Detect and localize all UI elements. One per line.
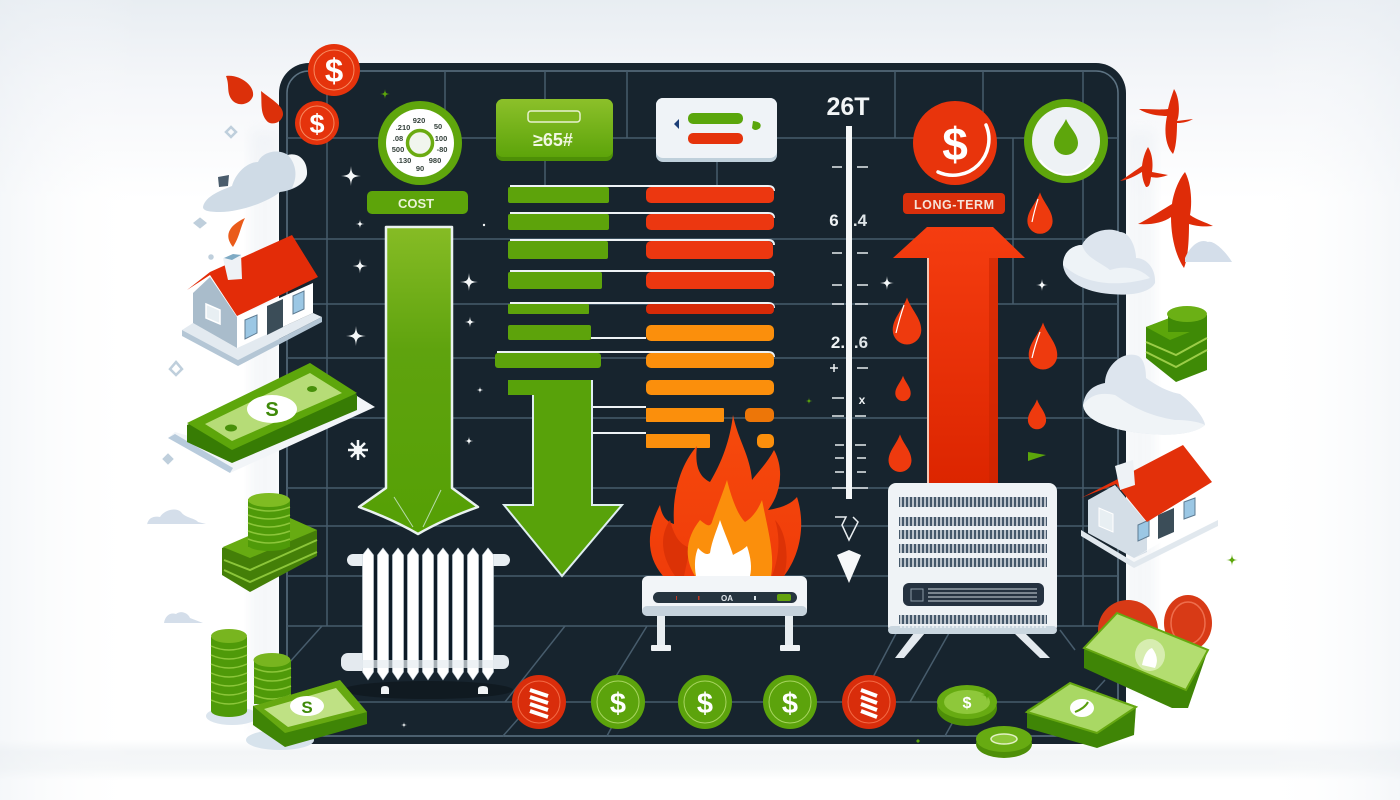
thermometer scale [826, 93, 870, 583]
arrow: second green down arrow [504, 380, 622, 576]
chart: paired green and red comparison bars [495, 186, 774, 448]
thermometer scale: 26T [826, 93, 870, 121]
icon: small clouds left [147, 510, 206, 623]
coin: red striped 2 [842, 675, 896, 729]
icon: red dollar circle: $ [942, 118, 968, 170]
icon: gauge dial: 50 [434, 122, 442, 131]
icon: red drops [889, 192, 1057, 472]
coin: green dollar 2 [678, 675, 732, 729]
icon: white air conditioner unit [888, 483, 1057, 658]
icon: clouds right [1063, 230, 1205, 435]
coin: red striped [512, 675, 566, 729]
icon: flat green coins: $ [963, 695, 972, 712]
thermometer scale: .6 [854, 333, 868, 352]
icon: flat green coins [937, 685, 1032, 758]
label: long-term: LONG-TERM [914, 198, 994, 212]
icon: house left [182, 218, 322, 366]
sparkles on board [341, 166, 1048, 728]
icon: coin stacks and bill bottom left: S [301, 698, 313, 717]
label: cost: COST [398, 196, 434, 211]
icon: gauge dial: 90 [416, 164, 424, 173]
green value box: ≥65# [533, 130, 573, 150]
icon: green cash bill left: S [265, 399, 279, 421]
icon: decorative diamonds and small marks left [164, 127, 236, 463]
icon: gauge dial: 100 [435, 134, 447, 143]
icon: gauge dial: .08 [393, 134, 403, 143]
arrow: red long-term up arrow [893, 227, 1025, 483]
icon: flame [650, 415, 801, 576]
icon: burner base: OA [721, 594, 733, 603]
coin: green dollar 3: $ [782, 688, 798, 720]
icon: red coins top left: $ [325, 52, 343, 89]
thermometer scale: x [859, 393, 866, 407]
icon: house right [1081, 445, 1218, 568]
icon: coin stacks and bill bottom left [206, 629, 367, 750]
icon: red dollar circle [913, 101, 997, 185]
icon: red drops top left [226, 76, 283, 123]
arrow: green cost down arrow [359, 227, 478, 534]
icon: gauge dial [378, 101, 462, 185]
small green accent marks [380, 89, 1238, 743]
label: long-term [903, 193, 1005, 214]
coin: green dollar 2: $ [697, 688, 713, 720]
thermometer scale: 2. [831, 333, 845, 352]
icon: cash stack bottom right [1027, 683, 1136, 748]
icon: small cloud top right [1185, 241, 1232, 262]
icon: gauge dial: 920 [413, 116, 425, 125]
icon: cash stack right [1146, 306, 1207, 382]
icon: large cash stack right [1084, 613, 1208, 708]
icon: gauge dial: .210 [396, 123, 410, 132]
legend box [656, 98, 777, 162]
coin: green dollar 1 [591, 675, 645, 729]
coin: green dollar 1: $ [610, 688, 626, 720]
icon: red coins behind cash [1098, 595, 1212, 660]
icon: green cash bill left [168, 363, 375, 473]
icon: red coins top left [295, 44, 360, 145]
icon: gauge dial: 500 [392, 145, 404, 154]
icon: cloud left [203, 151, 307, 212]
coin row [512, 675, 896, 729]
thermometer scale: 6 [829, 211, 839, 230]
panel: dark grid board [279, 63, 1126, 744]
icon: gauge dial: 980 [429, 156, 441, 165]
icon: red coins top left: $ [309, 109, 325, 139]
icon: red plane shapes [1120, 89, 1213, 268]
icon: green drop circle [1024, 99, 1108, 183]
icon: burner base [642, 576, 807, 651]
icon: coin and cash stack left [222, 493, 317, 592]
icon: gauge dial: -80 [437, 145, 447, 154]
icon: gauge dial: .130 [397, 156, 411, 165]
icon: radiator [341, 548, 513, 699]
coin: green dollar 3 [763, 675, 817, 729]
thermometer scale: .4 [853, 211, 868, 230]
label: cost [367, 191, 468, 214]
green value box [496, 99, 613, 161]
